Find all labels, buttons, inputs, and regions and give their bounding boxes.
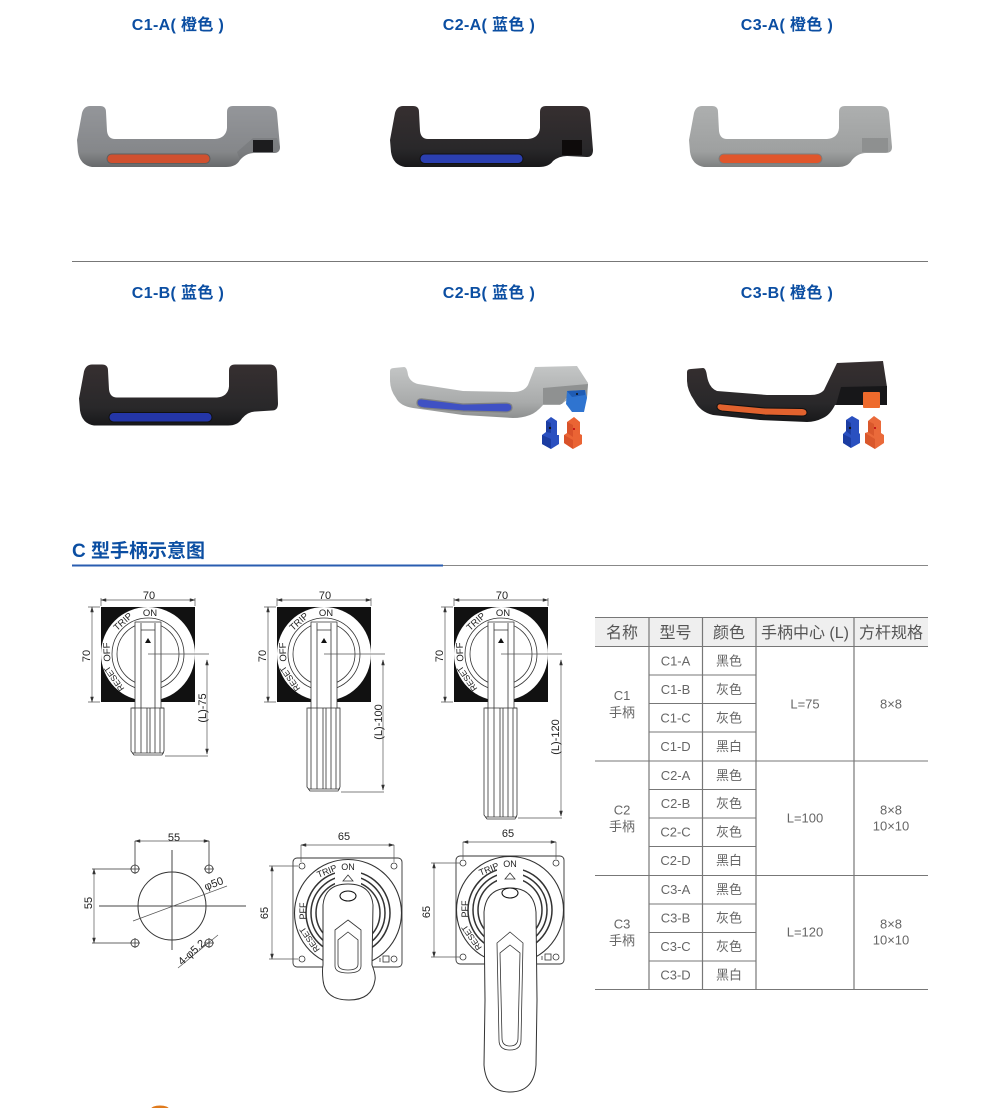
bottom edge orange mark (151, 1106, 169, 1108)
table group: C2: C2 (614, 802, 630, 818)
drawing: front view long handle (421, 828, 564, 1092)
product: C2-B grey handle with cubes (390, 366, 588, 449)
table header (606, 624, 923, 642)
drawing: front view short handle (259, 831, 402, 1000)
drawing: front view short handle: TRIP (315, 863, 338, 880)
product: C2-A black handle with blue inlay (390, 106, 593, 167)
drawing: top view L-100 (257, 590, 385, 792)
table group: C1: 手柄 (609, 705, 635, 720)
cube: orange spare (564, 417, 582, 449)
drawing: top view L-75: RESET (102, 664, 126, 693)
drawing: top view L-75: 70 (81, 650, 93, 662)
table group: C3: C3-A (661, 882, 691, 897)
drawing: front view long handle: 65 (502, 828, 514, 840)
table header: 名称 (606, 624, 638, 642)
table group: C2: 黑白 (716, 853, 742, 868)
drawing: front view long handle: RESET (459, 923, 484, 952)
table group: C3: 手柄 (609, 933, 635, 948)
table header: 型号 (659, 624, 692, 642)
drawing: top view L-100: RESET (278, 664, 302, 693)
drawing: top view L-75: (L)-75 (197, 693, 209, 723)
drawing: top view L-75: TRIP (112, 611, 135, 633)
label: C2-B: C2-B( 蓝色 ) (443, 283, 535, 302)
drawing: front view short handle: 65 (259, 907, 271, 919)
table group: C1: C1 (614, 688, 630, 703)
table group: C2: 灰色 (716, 824, 742, 840)
table group: C3: C3-B (661, 910, 690, 926)
drawing: front view short handle: RESET (297, 925, 322, 954)
drawing: top view L-120 (434, 590, 562, 819)
drawing: top view L-120: OFF (455, 642, 466, 662)
drawing: panel cut-out: 4-φ5.2 (176, 938, 208, 968)
table group: C3: 黑色 (716, 882, 742, 897)
drawing: front view long handle: PFF (460, 900, 470, 918)
table group: C1: 灰色 (716, 710, 742, 726)
label: C2-A: C2-A( 蓝色 ) (443, 15, 535, 34)
drawing: top view L-100: (L)-100 (373, 704, 385, 740)
drawing: top view L-100: TRIP (288, 611, 311, 633)
table header: 方杆规格 (859, 624, 923, 642)
table group: C3: 灰色 (716, 910, 742, 926)
drawing: top view L-120: ON (496, 608, 510, 619)
drawing: front view short handle: 65 (338, 831, 350, 843)
table group: C2: C2-A (661, 768, 691, 783)
table group: C1: 黑色 (716, 654, 742, 668)
drawing: front view long handle: TRIP (477, 861, 500, 878)
drawing: top view L-120: TRIP (465, 611, 488, 633)
drawing: top view L-120: (L)-120 (550, 719, 562, 755)
table group: C2: 10×10 (873, 818, 909, 834)
drawing: top view L-100: 70 (257, 650, 269, 662)
table group: C1: 8×8 (880, 696, 902, 712)
table group: C2 (609, 768, 909, 868)
label: C1-B: C1-B( 蓝色 ) (132, 283, 224, 302)
table header: 颜色 (713, 624, 745, 642)
product: C1-A grey handle with orange inlay (77, 106, 280, 167)
drawing: front view long handle: ON (503, 859, 517, 869)
heading: C 型手柄示意图 (72, 539, 205, 562)
drawing: panel cut-out: φ50 (203, 875, 225, 893)
table group: C3 (609, 882, 909, 982)
heading underline (72, 564, 928, 566)
table group: C2: 灰色 (716, 796, 742, 811)
table group: C2: L=100 (787, 810, 823, 826)
divider (72, 261, 928, 262)
table group: C3: C3 (614, 916, 630, 932)
cube: orange spare (865, 416, 884, 449)
icon: maker mark (542, 954, 551, 960)
table group: C1: 黑白 (716, 739, 742, 754)
label: C3-A: C3-A( 橙色 ) (741, 15, 833, 34)
icon: maker mark (380, 956, 389, 962)
table group: C3: L=120 (787, 924, 823, 940)
table group: C1: L=75 (790, 696, 820, 712)
drawing: panel cut-out: 55 (83, 897, 95, 909)
cube: blue spare (542, 417, 559, 449)
drawing: top view L-120: RESET (455, 664, 479, 693)
table group: C1: C1-C (660, 710, 691, 726)
drawing: top view L-100: ON (319, 608, 333, 619)
table group: C1: 灰色 (716, 682, 742, 697)
table group: C2: 手柄 (609, 819, 635, 834)
table group: C3: 黑白 (716, 968, 742, 982)
drawing: top view L-75: OFF (102, 642, 113, 662)
table group: C2: C2-D (660, 853, 691, 868)
product: C3-A light grey handle with orange inlay (689, 106, 892, 167)
table group: C2: 8×8 (880, 802, 902, 818)
label: C3-B: C3-B( 橙色 ) (741, 283, 833, 302)
drawing: top view L-100: OFF (278, 642, 289, 662)
drawing: top view L-75: ON (143, 608, 157, 619)
drawing: top view L-75: 70 (143, 590, 155, 602)
product: C1-B black handle with blue inlay (79, 364, 278, 426)
drawing: front view short handle: ON (341, 862, 355, 872)
table group: C3: C3-C (660, 939, 691, 954)
table group: C1: C1-A (661, 654, 691, 668)
cube: blue spare (843, 416, 860, 448)
table group: C3: 10×10 (873, 932, 909, 948)
drawing: top view L-120: 70 (496, 590, 508, 602)
label: C1-A: C1-A( 橙色 ) (132, 15, 224, 34)
table header: 手柄中心 (L) (761, 624, 849, 642)
drawing: front view long handle: 65 (421, 906, 433, 918)
table group: C3: 8×8 (880, 916, 902, 932)
drawing: top view L-75 (81, 590, 209, 756)
drawing: panel cut-out (83, 832, 246, 968)
drawing: panel cut-out: 55 (168, 832, 180, 844)
table group: C2: C2-B (661, 796, 690, 811)
table: handle specifications (595, 617, 928, 990)
table group: C3: C3-D (660, 968, 691, 982)
drawing: top view L-120: 70 (434, 650, 446, 662)
table group: C2: C2-C (660, 824, 691, 840)
table group: C3: 灰色 (716, 939, 742, 954)
table group: C1 (609, 654, 902, 754)
product: C3-B black handle with orange inlay and cubes (687, 361, 887, 449)
table group: C1: C1-D (660, 739, 691, 754)
drawing: front view short handle: PFF (298, 902, 308, 920)
table group: C1: C1-B (661, 682, 690, 697)
drawing: top view L-100: 70 (319, 590, 331, 602)
table group: C2: 黑色 (716, 768, 742, 783)
